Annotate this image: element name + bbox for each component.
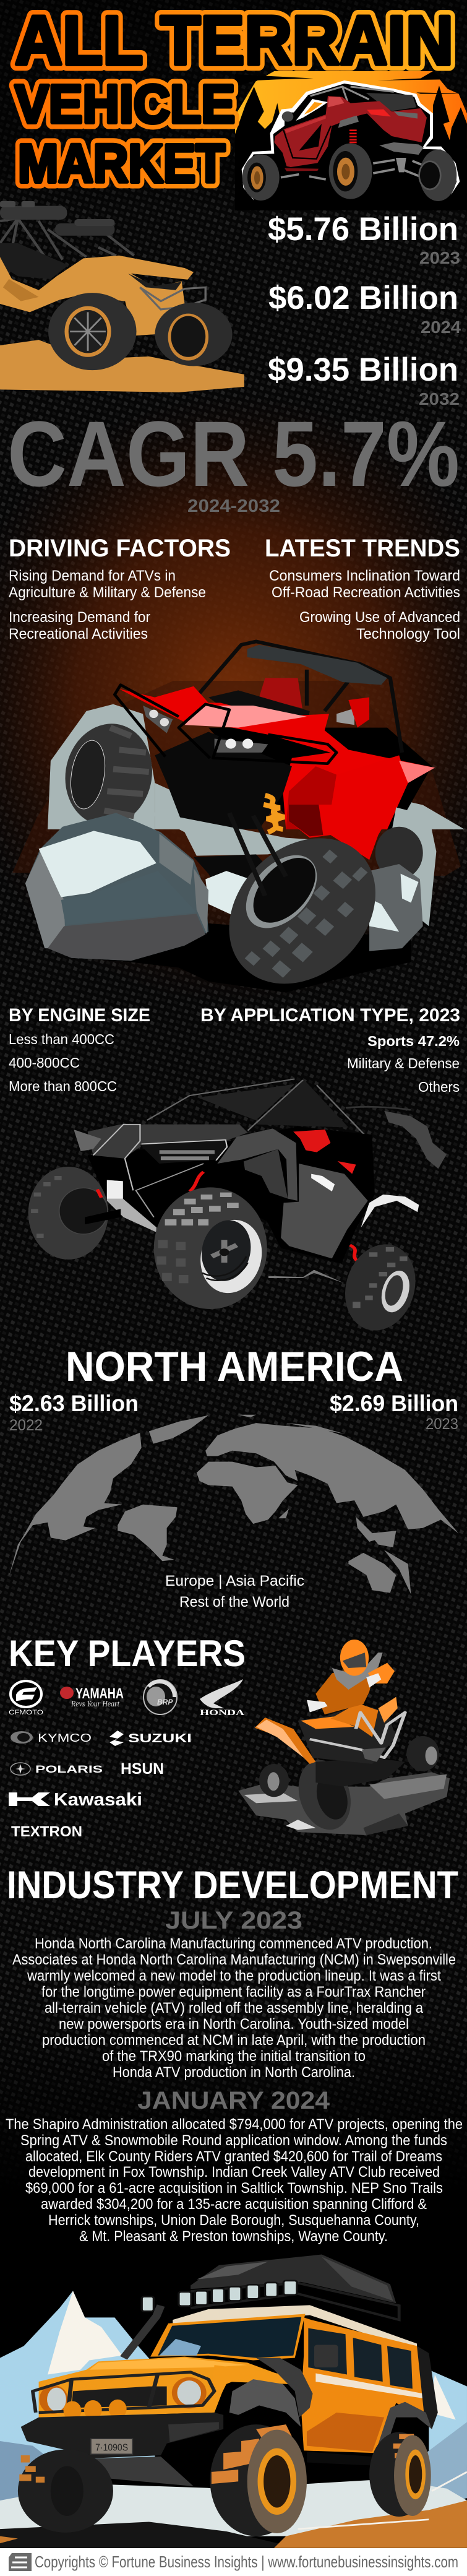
market value figures: 2024 [421,318,461,337]
panel: driving factors: Recreational Activities [9,626,148,642]
logo: Suzuki [109,1731,192,1746]
panel: by application type: BY APPLICATION TYPE, 2023 [200,1005,460,1026]
logo: Hisun: HSUN [121,1760,164,1778]
panel: driving factors: Agriculture & Military & Defense [9,584,206,601]
panel: by application type [200,1005,460,1095]
logo: Polaris [11,1763,103,1775]
panel: driving factors: DRIVING FACTORS [9,535,231,562]
panel: by application type: Others [418,1079,460,1095]
panel: by application type: Military & Defense [347,1055,460,1071]
heading: key players: KEY PLAYERS [9,1633,246,1674]
panel: driving factors [9,535,231,642]
market value figures: $5.76 Billion [268,211,458,248]
panel: by engine size: 400-800CC [9,1055,80,1071]
panel: by engine size: Less than 400CC [9,1031,114,1047]
logo: Kymco: KYMCO [38,1732,92,1744]
logo: Kawasaki: Kawasaki [54,1790,142,1810]
footer strip [0,2548,467,2576]
market value figures: 2032 [419,389,460,408]
illustration: orange SUV in mountains: 7·1090S [95,2442,128,2453]
market value figures [268,211,461,408]
title: VEHICLE [15,74,235,134]
panel: by engine size: BY ENGINE SIZE [9,1005,150,1026]
panel: by engine size: More than 800CC [9,1078,117,1094]
market value figures: $9.35 Billion [268,352,458,388]
text block: July 2023: all-terrain vehicle (ATV) rolled off the assembly line, heralding a [45,2000,424,2016]
years for North America values: 2022 [9,1417,43,1434]
years for North America values [9,1416,458,1434]
title: ALL TERRAIN [15,2,453,79]
logo: Kawasaki [9,1790,142,1810]
footer logo [9,2553,32,2571]
text block: July 2023: Honda North Carolina Manufacturing commenced ATV production. [35,1935,432,1952]
other regions: Rest of the World [179,1594,289,1610]
logo: Honda [200,1679,245,1717]
other regions: Europe | Asia Pacific [165,1573,304,1589]
text block: January 2024: & Mt. Pleasant & Preston townships, Wayne County. [79,2228,388,2245]
panel: latest trends [265,535,460,642]
logo: CFMOTO [9,1681,44,1716]
market value figures: 2023 [419,248,460,267]
logo: Yamaha [60,1685,124,1709]
panel: latest trends: Technology Tool [356,626,460,642]
text block: July 2023: for the longtime power equipment facility as a FourTrax Rancher [41,1984,426,2000]
illustration: sunset with trees and red UTV [235,71,467,210]
other regions [165,1573,304,1610]
illustration: ATV rider on rocks [238,1640,450,1835]
title [15,2,453,194]
market value figures: $6.02 Billion [268,280,458,316]
panel: by application type: Sports 47.2% [367,1033,460,1049]
logo: Kymco [11,1731,92,1744]
text block: January 2024: Herrick townships, Union Dale Borough, Susquehanna County, [48,2212,419,2229]
panel: latest trends: LATEST TRENDS [265,535,460,562]
text block: January 2024: JANUARY 2024 [137,2087,330,2114]
panel: driving factors: Rising Demand for ATVs in [9,568,176,584]
text block: January 2024: awarded $304,200 for a 135-acre acquisition spanning Clifford & [41,2196,427,2213]
illustration: tan off-road buggy on sand [0,201,244,392]
heading: North America: NORTH AMERICA [66,1343,403,1390]
text block: July 2023: new powersports era in North Carolina. Youth-sized model [59,2016,409,2033]
text block: July 2023: Honda ATV production in North Carolina. [113,2064,355,2081]
title: MARKET [18,134,225,194]
heading: North America [9,1343,458,1416]
panel: latest trends: Growing Use of Advanced [299,609,460,626]
logo: Polaris: POLARIS [35,1763,103,1775]
illustration: red UTV climbing rocks [12,641,465,1011]
logo: CFMOTO: CFMOTO [9,1709,44,1716]
text block: January 2024 [6,2087,463,2245]
CAGR figure: 2024-2032 [187,496,280,516]
map: world globe [9,1415,459,1594]
logo: Yamaha: Revs Your Heart [71,1700,120,1709]
logo: Honda: HONDA [200,1708,245,1717]
text block: July 2023: production commenced at NCM in late April, with the production [42,2032,426,2049]
logo: Textron: TEXTRON [11,1823,82,1840]
text block: July 2023 [12,1907,456,2081]
title: ALL TERRAIN [15,2,453,79]
years for North America values: 2023 [426,1416,458,1433]
logo: BRP [144,1680,177,1714]
heading: North America: $2.69 Billion [330,1391,458,1416]
heading: North America: $2.63 Billion [9,1391,139,1416]
text block: July 2023: of the TRX90 marking the initial transition to [102,2048,366,2065]
logo: Suzuki: SUZUKI [128,1732,192,1745]
illustration: black UTV [28,1079,447,1334]
panel: by engine size [9,1005,150,1094]
title: VEHICLE [15,74,235,134]
logo: BRP: BRP [157,1698,173,1706]
text block: July 2023: JULY 2023 [165,1907,302,1934]
title: MARKET [18,134,225,194]
text block: July 2023: warmly welcomed a new model to the production lineup. It was a first [27,1968,441,1984]
panel: latest trends: Consumers Inclination Toward [269,568,460,584]
panel: latest trends: Off-Road Recreation Activities [272,584,460,601]
panel: driving factors: Increasing Demand for [9,609,150,626]
illustration: orange SUV in mountains [0,2255,467,2548]
logo: Yamaha: YAMAHA [75,1685,124,1702]
